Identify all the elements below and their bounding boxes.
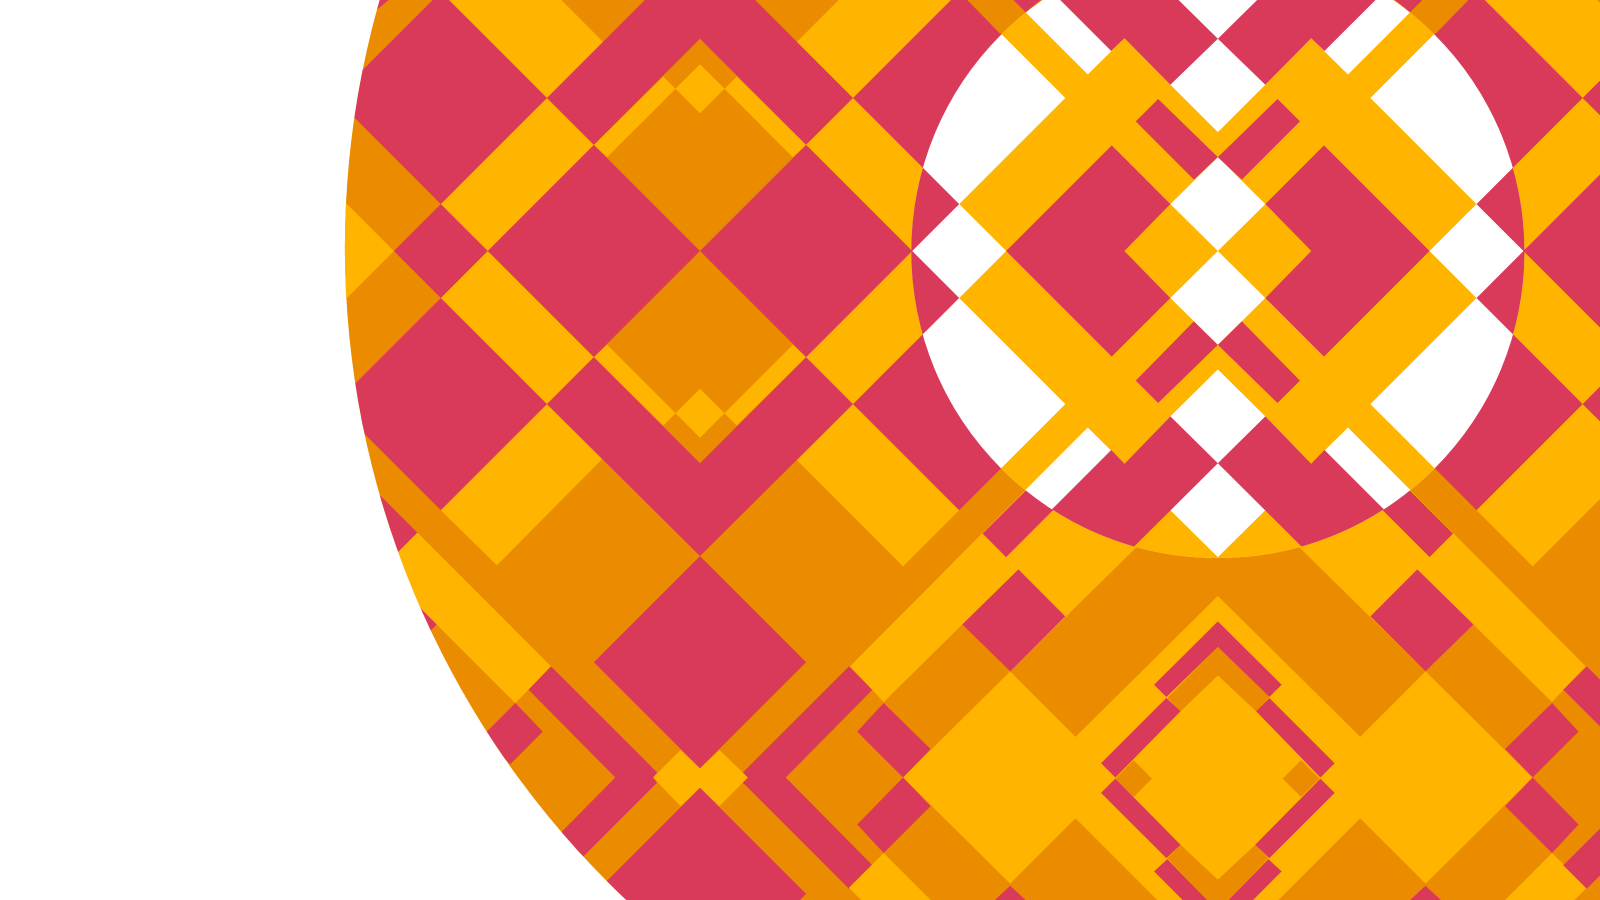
- inner yellow lattice: [959, 11, 1477, 491]
- orange chevron under inner circle: [1088, 596, 1426, 736]
- orange accents on the inner circle edge: [967, 0, 1468, 34]
- inner central diamonds: yellow: [1124, 204, 1311, 298]
- side pattern: right of centre: [1293, 0, 1600, 900]
- inner central diamonds: white: [959, 157, 1476, 345]
- graphic: patterned circles: [344, 0, 1600, 900]
- inner bottom yellow arc segment: [1131, 510, 1304, 558]
- inner red bars: [1136, 99, 1300, 403]
- red shapes: left pattern: [335, 0, 872, 900]
- ring: orange chevron top: [1167, 647, 1269, 711]
- inner red chevrons: [1006, 145, 1430, 357]
- side pattern: left of centre: [700, 0, 1143, 900]
- inner red top and bottom shapes: [1052, 0, 1384, 546]
- ring: orange details: [1115, 760, 1319, 900]
- small red tips at bottom: [995, 886, 1441, 900]
- central star: yellow: [903, 596, 1533, 900]
- ring: red sides: [1101, 698, 1335, 900]
- orange lower chevrons: [1278, 818, 1360, 900]
- inner red edge wedges: [911, 168, 1524, 334]
- panel: inner circle: [911, 0, 1524, 558]
- ring motif around lower centre: [1101, 621, 1335, 900]
- ring: red chevron top: [1154, 621, 1282, 697]
- yellow bands: left pattern: [327, 0, 806, 806]
- inner circle white disc: [903, 0, 1536, 566]
